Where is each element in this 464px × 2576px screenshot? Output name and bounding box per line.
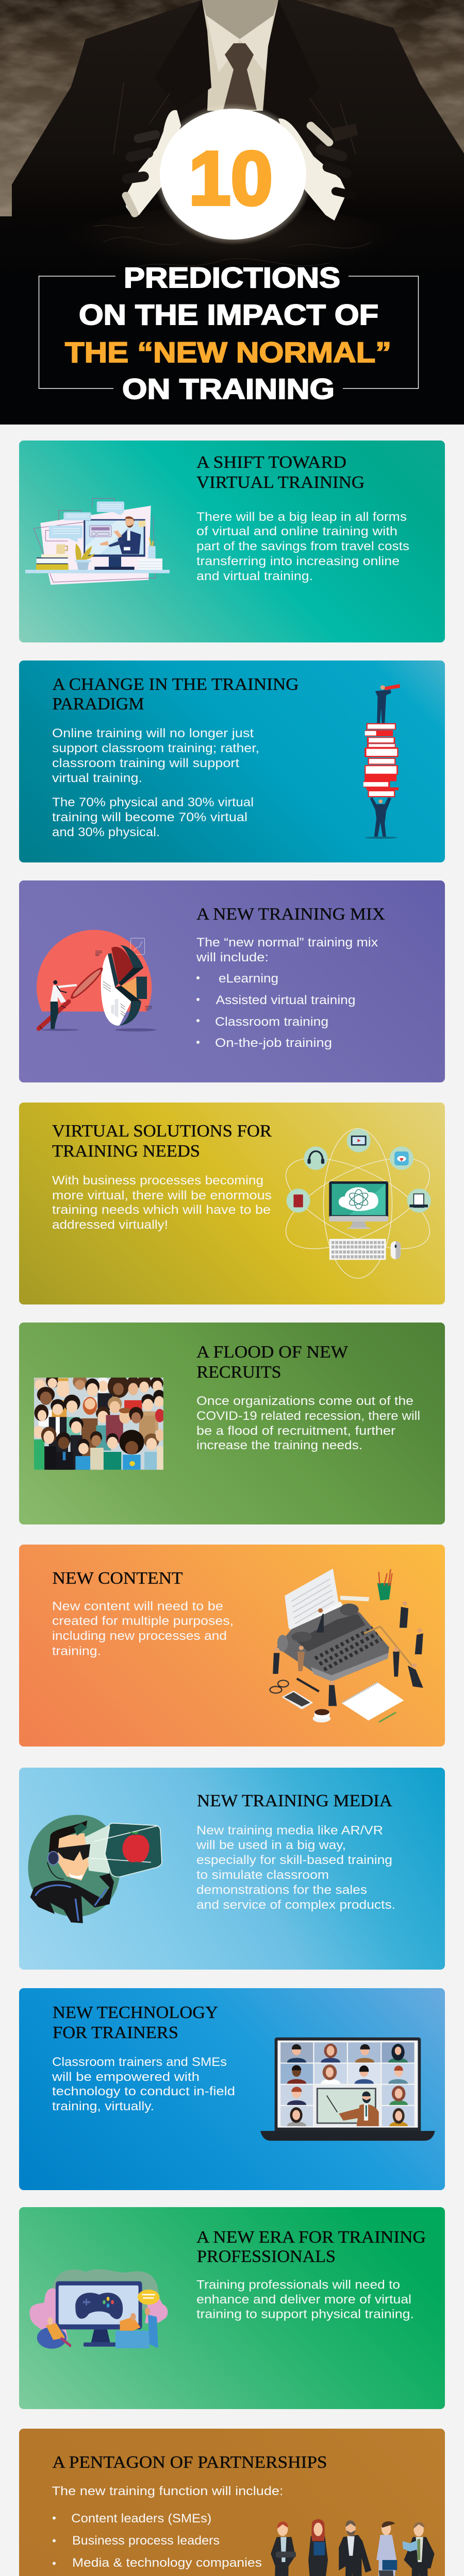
ball core bbox=[160, 109, 306, 240]
panel: new training media bbox=[19, 1768, 445, 1970]
heading: TRAINING NEEDS bbox=[52, 1142, 200, 1161]
body text: There will be a big leap in all forms bbox=[196, 510, 407, 524]
panel: a pentagon of partnerships bbox=[19, 2429, 445, 2576]
body text bbox=[196, 936, 378, 964]
body text: training, virtually. bbox=[52, 2099, 154, 2113]
body text: enhance and deliver more of virtual bbox=[196, 2293, 411, 2307]
panel: a change in the training paradigm bbox=[19, 660, 445, 862]
heading: A CHANGE IN THE TRAINING bbox=[53, 675, 299, 694]
illustration: virtual trainer on monitor bbox=[25, 498, 170, 585]
heading: VIRTUAL TRAINING bbox=[196, 473, 364, 492]
panel: a new era for training professionals bbox=[19, 2207, 445, 2409]
body text: and virtual training. bbox=[196, 569, 313, 583]
heading bbox=[196, 2228, 426, 2266]
title text: ON TRAINING bbox=[122, 372, 335, 405]
heading: A NEW TRAINING MIX bbox=[196, 905, 385, 924]
body text: Once organizations come out of the bbox=[196, 1394, 413, 1408]
body text bbox=[52, 726, 259, 839]
title text: THE “NEW NORMAL” bbox=[65, 336, 391, 368]
illustration: laptop with video call grid bbox=[260, 2038, 435, 2141]
body text: will be used in a big way, bbox=[196, 1838, 346, 1852]
body text: The 70% physical and 30% virtual bbox=[52, 795, 254, 809]
heading: A PENTAGON OF PARTNERSHIPS bbox=[53, 2453, 327, 2472]
body text: part of the savings from travel costs bbox=[196, 539, 409, 553]
body text: COVID-19 related recession, there will bbox=[196, 1409, 420, 1423]
illustration: five business people bbox=[269, 2519, 435, 2576]
body text: be a flood of recruitment, further bbox=[196, 1424, 395, 1438]
panel: a shift toward virtual training bbox=[19, 440, 445, 642]
body text bbox=[196, 1824, 395, 1912]
body text: Online training will no longer just bbox=[52, 726, 254, 740]
body text: especially for skill-based training bbox=[196, 1853, 392, 1867]
body text bbox=[52, 1599, 234, 1658]
illustration: man in VR headset with apple bbox=[28, 1815, 162, 1923]
illustration: game controller on monitor bbox=[29, 2269, 168, 2349]
heading: NEW TECHNOLOGY bbox=[53, 2003, 218, 2022]
body text: to simulate classroom bbox=[196, 1868, 329, 1882]
heading bbox=[53, 2003, 218, 2042]
left hand bbox=[126, 110, 181, 217]
body text: training. bbox=[52, 1645, 101, 1658]
heading: PARADIGM bbox=[53, 694, 144, 714]
photo background bbox=[0, 0, 464, 216]
bullet list: Assisted virtual training bbox=[216, 993, 356, 1007]
illustration: computer with orbiting learning icons bbox=[272, 1129, 444, 1278]
bullet list: Media & technology companies bbox=[72, 2556, 262, 2570]
heading: FOR TRAINERS bbox=[53, 2023, 178, 2042]
heading: NEW TRAINING MEDIA bbox=[197, 1791, 392, 1810]
panel: a flood of new recruits bbox=[19, 1323, 445, 1524]
body text: will include: bbox=[196, 951, 269, 964]
heading bbox=[196, 453, 364, 492]
heading bbox=[53, 675, 299, 714]
title text: PREDICTIONS bbox=[124, 261, 340, 294]
heading: RECRUITS bbox=[197, 1363, 281, 1382]
illustration: men on a stack of books with telescope bbox=[363, 684, 400, 839]
body text bbox=[196, 510, 409, 583]
man in suit bbox=[0, 0, 464, 425]
panel: virtual solutions for training needs bbox=[19, 1103, 445, 1304]
body text bbox=[196, 1394, 420, 1452]
glowing crystal ball bbox=[153, 103, 313, 245]
heading bbox=[196, 1343, 349, 1382]
bullet list bbox=[53, 2512, 262, 2576]
heading bbox=[52, 1122, 272, 1161]
body text: Classroom trainers and SMEs bbox=[52, 2055, 227, 2069]
heading: A NEW ERA FOR TRAINING bbox=[196, 2228, 426, 2247]
heading: A FLOOD OF NEW bbox=[196, 1343, 349, 1362]
body text: The new training function will include: bbox=[52, 2484, 284, 2498]
body text bbox=[52, 1174, 272, 1232]
body text: of virtual and online training with bbox=[196, 524, 397, 538]
right hand bbox=[278, 118, 352, 221]
body text: New content will need to be bbox=[52, 1599, 223, 1614]
body text: Training professionals will need to bbox=[196, 2278, 400, 2292]
title text: ON THE IMPACT OF bbox=[79, 298, 378, 331]
heading: NEW CONTENT bbox=[53, 1569, 183, 1588]
body text: transferring into increasing online bbox=[196, 554, 400, 568]
body text bbox=[52, 2055, 235, 2113]
body text: training to support physical training. bbox=[196, 2307, 414, 2321]
cloth wrinkles bbox=[62, 206, 402, 278]
bullet list bbox=[196, 972, 356, 1050]
bullet list: Classroom training bbox=[215, 1015, 328, 1029]
panel: a new training mix bbox=[19, 880, 445, 1082]
header: crystal ball photo and title bbox=[0, 0, 464, 425]
body text: more virtual, there will be enormous bbox=[52, 1189, 272, 1202]
body text: New training media like AR/VR bbox=[196, 1824, 383, 1837]
body text: training will become 70% virtual bbox=[52, 810, 247, 824]
body text: The “new normal” training mix bbox=[196, 936, 378, 950]
number 10: 10 bbox=[189, 136, 273, 221]
body text: and service of complex products. bbox=[196, 1898, 395, 1912]
bullet list: eLearning bbox=[219, 972, 278, 986]
body text: With business processes becoming bbox=[52, 1174, 263, 1188]
bullet list: On-the-job training bbox=[215, 1036, 332, 1050]
illustration: typewriter and small figures bbox=[270, 1569, 423, 1722]
body text: virtual training. bbox=[52, 771, 142, 785]
bullet list: Business process leaders bbox=[72, 2534, 220, 2548]
title frame bbox=[39, 276, 419, 388]
black base of header bbox=[0, 216, 464, 425]
body text: addressed virtually! bbox=[52, 1218, 168, 1232]
body text: created for multiple purposes, bbox=[52, 1614, 234, 1628]
body text: demonstrations for the sales bbox=[196, 1883, 367, 1897]
illustration: crowd of people bbox=[33, 1374, 165, 1470]
body text: classroom training will support bbox=[52, 756, 239, 770]
heading: VIRTUAL SOLUTIONS FOR bbox=[52, 1122, 272, 1141]
body text: technology to conduct in-field bbox=[52, 2084, 235, 2098]
body text bbox=[196, 2278, 414, 2321]
body text: increase the training needs. bbox=[196, 1438, 362, 1452]
body text: support classroom training; rather, bbox=[52, 741, 259, 755]
heading: A SHIFT TOWARD bbox=[196, 453, 346, 472]
illustration: magnifier and pie chart bbox=[37, 930, 156, 1031]
body text: will be empowered with bbox=[52, 2070, 200, 2084]
body text: training needs which will have to be bbox=[52, 1203, 271, 1217]
panel: new technology for trainers bbox=[19, 1988, 445, 2190]
body text: including new processes and bbox=[52, 1629, 227, 1643]
bullet list: Content leaders (SMEs) bbox=[71, 2512, 211, 2526]
body text: and 30% physical. bbox=[52, 825, 160, 839]
panel: new content bbox=[19, 1545, 445, 1747]
title text bbox=[65, 261, 391, 405]
heading: PROFESSIONALS bbox=[197, 2247, 336, 2266]
